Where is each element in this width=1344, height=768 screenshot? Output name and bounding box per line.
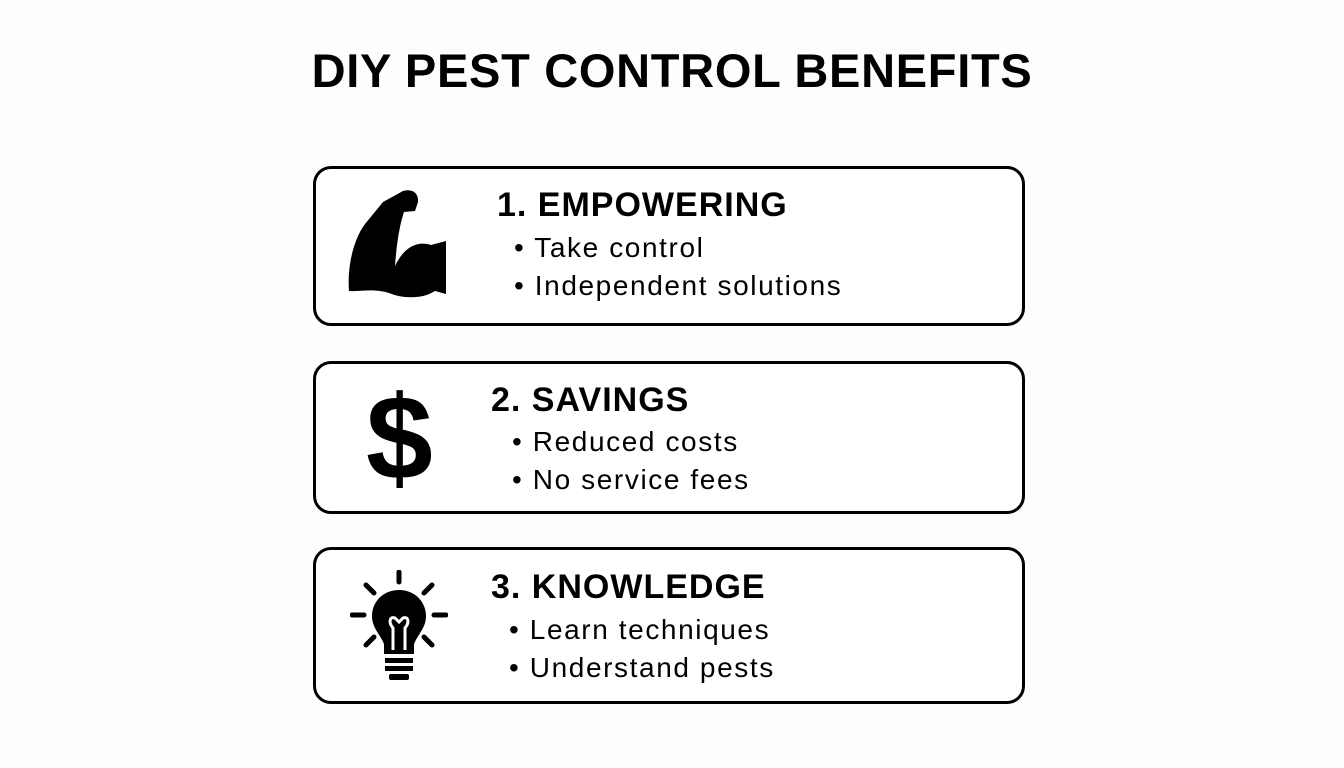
icon: flexed arm xyxy=(348,190,446,298)
heading: 3. KNOWLEDGE xyxy=(491,568,766,606)
panel: knowledge: • Understand pests xyxy=(509,652,775,683)
panel: savings xyxy=(313,361,1025,514)
heading: 2. SAVINGS xyxy=(491,381,689,419)
panel: knowledge: • Learn techniques xyxy=(509,614,770,645)
bullet list xyxy=(514,232,842,301)
panel: empowering xyxy=(313,166,1025,326)
panel: empowering: • Independent solutions xyxy=(514,270,842,301)
icon: light bulb xyxy=(350,570,448,680)
panel: savings: • No service fees xyxy=(512,464,750,495)
panel: knowledge xyxy=(313,547,1025,704)
title: DIY PEST CONTROL BENEFITS xyxy=(312,44,1032,97)
bullet list xyxy=(509,614,775,683)
bullet list xyxy=(512,426,750,495)
panel: savings: • Reduced costs xyxy=(512,426,739,457)
heading: 1. EMPOWERING xyxy=(497,186,788,224)
panel: empowering: • Take control xyxy=(514,232,704,263)
icon: dollar sign: $ xyxy=(366,371,433,505)
